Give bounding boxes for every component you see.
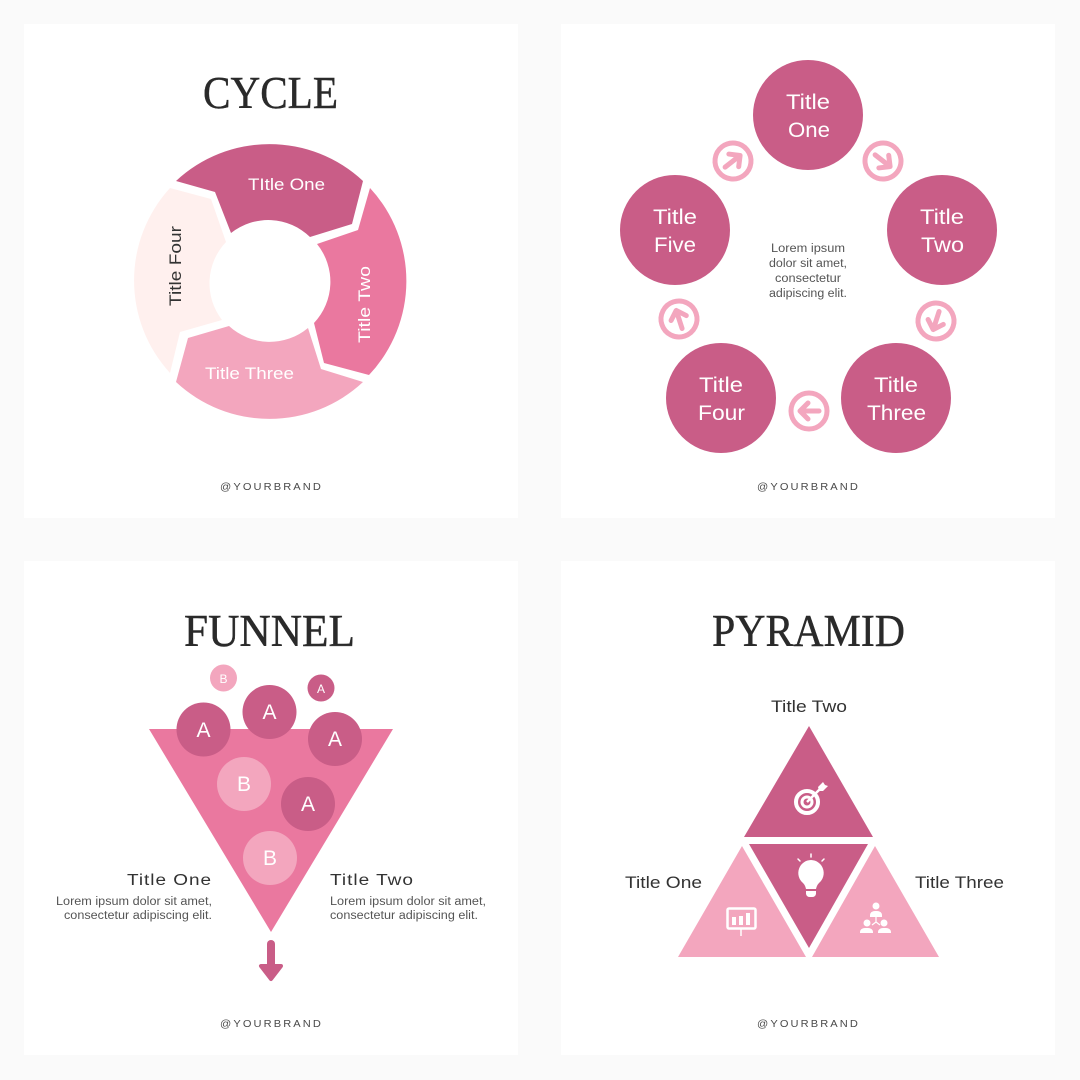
segment: title three: Title Three xyxy=(205,364,294,383)
icon: light bulb xyxy=(798,854,824,897)
center text: consectetur xyxy=(775,273,841,285)
text block: title two xyxy=(330,872,486,922)
node: title three: Title xyxy=(874,374,918,397)
segment: title four: Title Four xyxy=(166,226,185,306)
brand handle: @YOURBRAND xyxy=(757,481,860,493)
arrow: three to four xyxy=(791,393,827,429)
funnel balls: A xyxy=(196,719,211,742)
icon: target xyxy=(796,782,828,813)
node: title one: Title xyxy=(786,91,830,114)
panel: funnel xyxy=(24,561,518,1055)
text block: title two: consectetur adipiscing elit. xyxy=(330,910,478,922)
node: title two: Two xyxy=(921,234,964,257)
panel: cycle xyxy=(24,24,518,518)
funnel balls: B xyxy=(237,773,251,796)
funnel balls xyxy=(176,664,362,885)
heading: pyramid: PYRAMID xyxy=(712,606,905,656)
funnel balls: A xyxy=(262,701,277,724)
funnel balls: A xyxy=(301,793,315,816)
text block: title one xyxy=(56,872,212,922)
text block: title two: Lorem ipsum dolor sit amet, xyxy=(330,896,486,908)
node: title four: Four xyxy=(698,402,745,425)
node: title one xyxy=(753,60,863,170)
funnel balls: B xyxy=(263,847,277,870)
center text: adipiscing elit. xyxy=(769,288,847,300)
node: title three: Three xyxy=(867,402,926,425)
icon: presentation board xyxy=(728,908,756,936)
label: title one: Title One xyxy=(625,873,702,892)
text block: title one: Title One xyxy=(127,872,212,889)
text block: title one: consectetur adipiscing elit. xyxy=(64,910,212,922)
label: title three: Title Three xyxy=(915,873,1004,892)
segment: title two xyxy=(314,188,406,375)
brand handle: @YOURBRAND xyxy=(757,1018,860,1030)
heading: funnel: FUNNEL xyxy=(184,606,355,656)
funnel balls: A xyxy=(328,728,342,751)
panel: pyramid xyxy=(561,561,1055,1055)
triangle: left xyxy=(678,846,806,957)
text block: title two: Title Two xyxy=(330,872,414,889)
node: title two xyxy=(887,175,997,285)
center text: Lorem ipsum xyxy=(771,243,845,255)
label: title two: Title Two xyxy=(771,697,847,716)
funnel balls: A xyxy=(317,682,325,696)
segment: title three xyxy=(176,326,363,419)
node: title one: One xyxy=(788,119,830,142)
segment: title one: TItle One xyxy=(248,175,325,194)
node: title four: Title xyxy=(699,374,743,397)
segment: title one xyxy=(176,144,363,237)
arrow: one to two xyxy=(858,136,908,186)
funnel triangle xyxy=(149,729,393,932)
panel: process xyxy=(561,24,1055,518)
icon: team hierarchy xyxy=(860,902,891,933)
arrow: funnel output xyxy=(261,944,281,979)
center text: dolor sit amet, xyxy=(769,258,847,270)
brand handle: @YOURBRAND xyxy=(220,1018,323,1030)
node: title five xyxy=(620,175,730,285)
node: title five: Title xyxy=(653,206,697,229)
heading: cycle: CYCLE xyxy=(203,68,338,118)
text block: title one: Lorem ipsum dolor sit amet, xyxy=(56,896,212,908)
cycle diagram xyxy=(134,144,406,419)
center text xyxy=(769,243,847,300)
brand handle: @YOURBRAND xyxy=(220,481,323,493)
arrow: two to three xyxy=(913,298,959,344)
node: title four xyxy=(666,343,776,453)
arrow: five to one xyxy=(708,136,758,186)
node: title five: Five xyxy=(654,234,696,257)
triangle: center xyxy=(749,844,868,948)
segment: title two: Title Two xyxy=(355,266,374,343)
node: title two: Title xyxy=(920,206,964,229)
segment: title four xyxy=(134,188,226,373)
funnel balls: B xyxy=(219,672,228,686)
triangle: right xyxy=(812,846,939,957)
node: title three xyxy=(841,343,951,453)
arrow: four to five xyxy=(656,296,702,342)
triangle: top xyxy=(744,726,873,837)
